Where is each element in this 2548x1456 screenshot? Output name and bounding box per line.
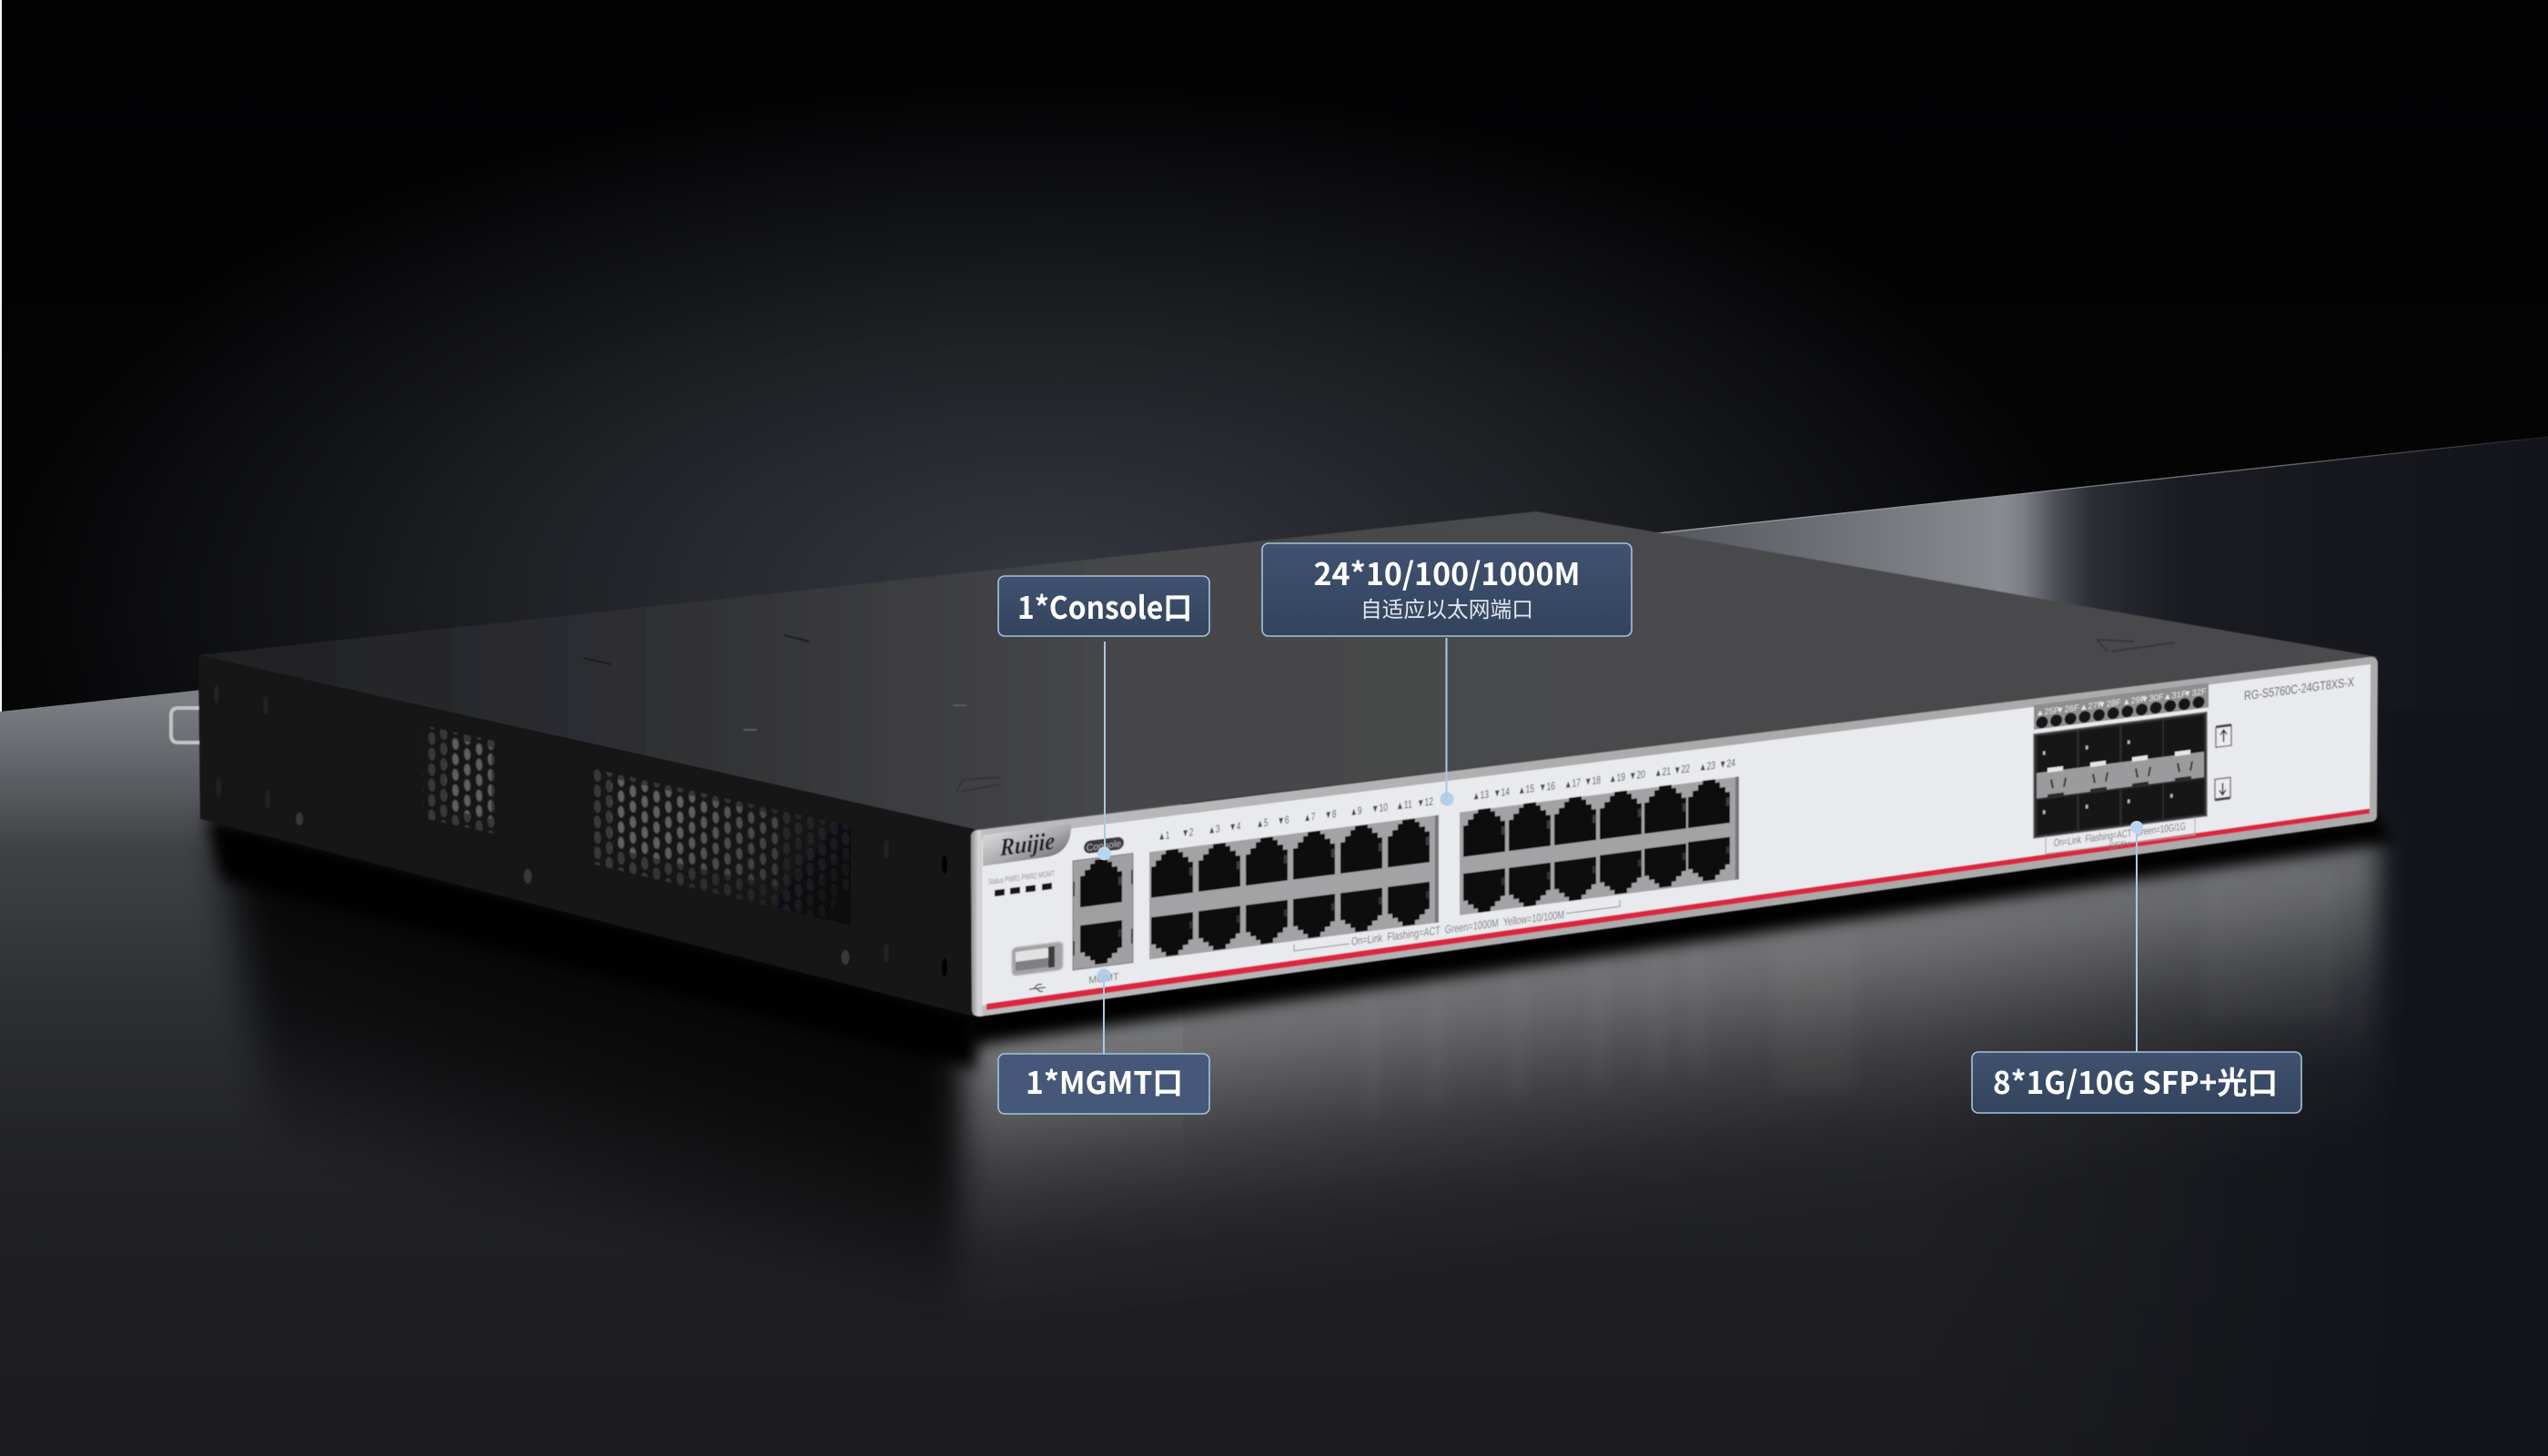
- port number labels: ▼20: [1629, 768, 1645, 783]
- logo plate: Ruijie: [999, 827, 1055, 861]
- icon: slot direction down: [2215, 777, 2230, 801]
- callout: MGMT: 1*MGMT口: [1026, 1058, 1183, 1103]
- rear rack handle: [171, 708, 202, 743]
- port number labels: ▼24: [1719, 756, 1735, 771]
- port number labels: ▼18: [1584, 774, 1601, 788]
- port number labels: ▲21: [1654, 764, 1671, 779]
- SFP LED strip: ▼26F: [2056, 703, 2079, 716]
- console and MGMT port block: [1073, 854, 1133, 970]
- side screw holes: [214, 685, 947, 976]
- icon: slot direction up: [2216, 723, 2231, 747]
- port number labels: ▲11: [1396, 797, 1412, 813]
- RJ45 ports 13-24: [1460, 776, 1739, 915]
- port number labels: ▼4: [1229, 819, 1241, 834]
- port number labels: ▲7: [1304, 810, 1316, 824]
- port number labels: [1158, 756, 1735, 843]
- port number labels: ▲19: [1609, 770, 1625, 785]
- port number labels: ▲23: [1699, 759, 1715, 774]
- port number labels: ▲15: [1518, 782, 1534, 796]
- SFP legend: SFP+: [2108, 839, 2132, 852]
- floor horizon highlight: [1649, 437, 2548, 534]
- logo plate: [983, 824, 1071, 866]
- port number labels: ▼8: [1325, 807, 1337, 822]
- callout: ethernet ports: 24*10/100/1000M: [1314, 550, 1580, 594]
- SFP LED strip: [2034, 682, 2209, 730]
- SFP legend: On=Link Flashing=ACT Green=10G/1G: [2054, 822, 2186, 849]
- USB port: [1012, 941, 1063, 996]
- port number labels: ▲13: [1472, 788, 1489, 803]
- port number labels: ▼22: [1673, 762, 1690, 777]
- SFP LED strip: ▲29F: [2122, 694, 2146, 707]
- SFP LED strip: ▲27F: [2079, 700, 2103, 713]
- callout: ethernet ports: [1262, 543, 1632, 806]
- front panel left edge: [971, 830, 986, 1016]
- callout: SFP+: 8*1G/10G SFP+光口: [1993, 1058, 2278, 1103]
- side vent: small: [423, 725, 498, 834]
- model name: RG-S5760C-24GT8XS-X: [2244, 674, 2354, 703]
- status LEDs: [988, 869, 1055, 897]
- SFP legend: [2046, 816, 2195, 860]
- port number labels: ▼12: [1417, 794, 1433, 810]
- port number labels: ▼16: [1539, 779, 1555, 794]
- floor: reflective table surface: [0, 428, 2548, 1456]
- port number labels: ▲17: [1564, 776, 1581, 791]
- callout: console: [998, 576, 1209, 861]
- console label pill: Console: [1087, 838, 1121, 854]
- front panel face: [981, 664, 2371, 1006]
- callout: MGMT: [998, 968, 1209, 1114]
- SFP LED strip: ▼32F: [2183, 687, 2207, 700]
- callout: SFP+: [1972, 821, 2301, 1113]
- SFP LED strip: ▲31F: [2163, 689, 2187, 703]
- panel details in perspective: [983, 660, 2354, 1000]
- front panel frame: [971, 657, 2378, 1016]
- chassis top surface: [198, 511, 2378, 829]
- port number labels: ▲9: [1350, 804, 1362, 818]
- port number labels: ▼6: [1278, 814, 1289, 827]
- port number labels: ▼2: [1181, 825, 1194, 840]
- port legend: On=Link Flashing=ACT Green=1000M Yellow=10/100M: [1351, 908, 1564, 948]
- port number labels: ▼14: [1493, 785, 1510, 800]
- chassis side panel: [198, 655, 975, 1016]
- SFP LED strip: ▼30F: [2140, 693, 2164, 705]
- port number labels: ▲1: [1158, 828, 1170, 843]
- side vent: large: [594, 769, 851, 925]
- port legend: [1294, 900, 1620, 956]
- SFP LED strip: ▲25F: [2036, 705, 2059, 719]
- SFP+ cage block: [2034, 713, 2207, 838]
- SFP LED strip: ▼28F: [2098, 698, 2121, 711]
- callout: console: 1*Console口: [1017, 583, 1192, 628]
- MGMT label: MGMT: [1088, 972, 1119, 986]
- callout: ethernet ports: 自适应以太网端口: [1360, 592, 1533, 623]
- RJ45 ports 1-12: [1149, 815, 1439, 959]
- port number labels: ▼10: [1371, 801, 1388, 815]
- red stripe: [986, 808, 2370, 1010]
- switch chassis: [171, 511, 2378, 1016]
- port number labels: ▲5: [1256, 816, 1269, 830]
- port number labels: ▲3: [1208, 822, 1220, 836]
- status LEDs: Status PWR1 PWR2 MGMT: [988, 869, 1055, 886]
- top surface marks: [583, 635, 2175, 794]
